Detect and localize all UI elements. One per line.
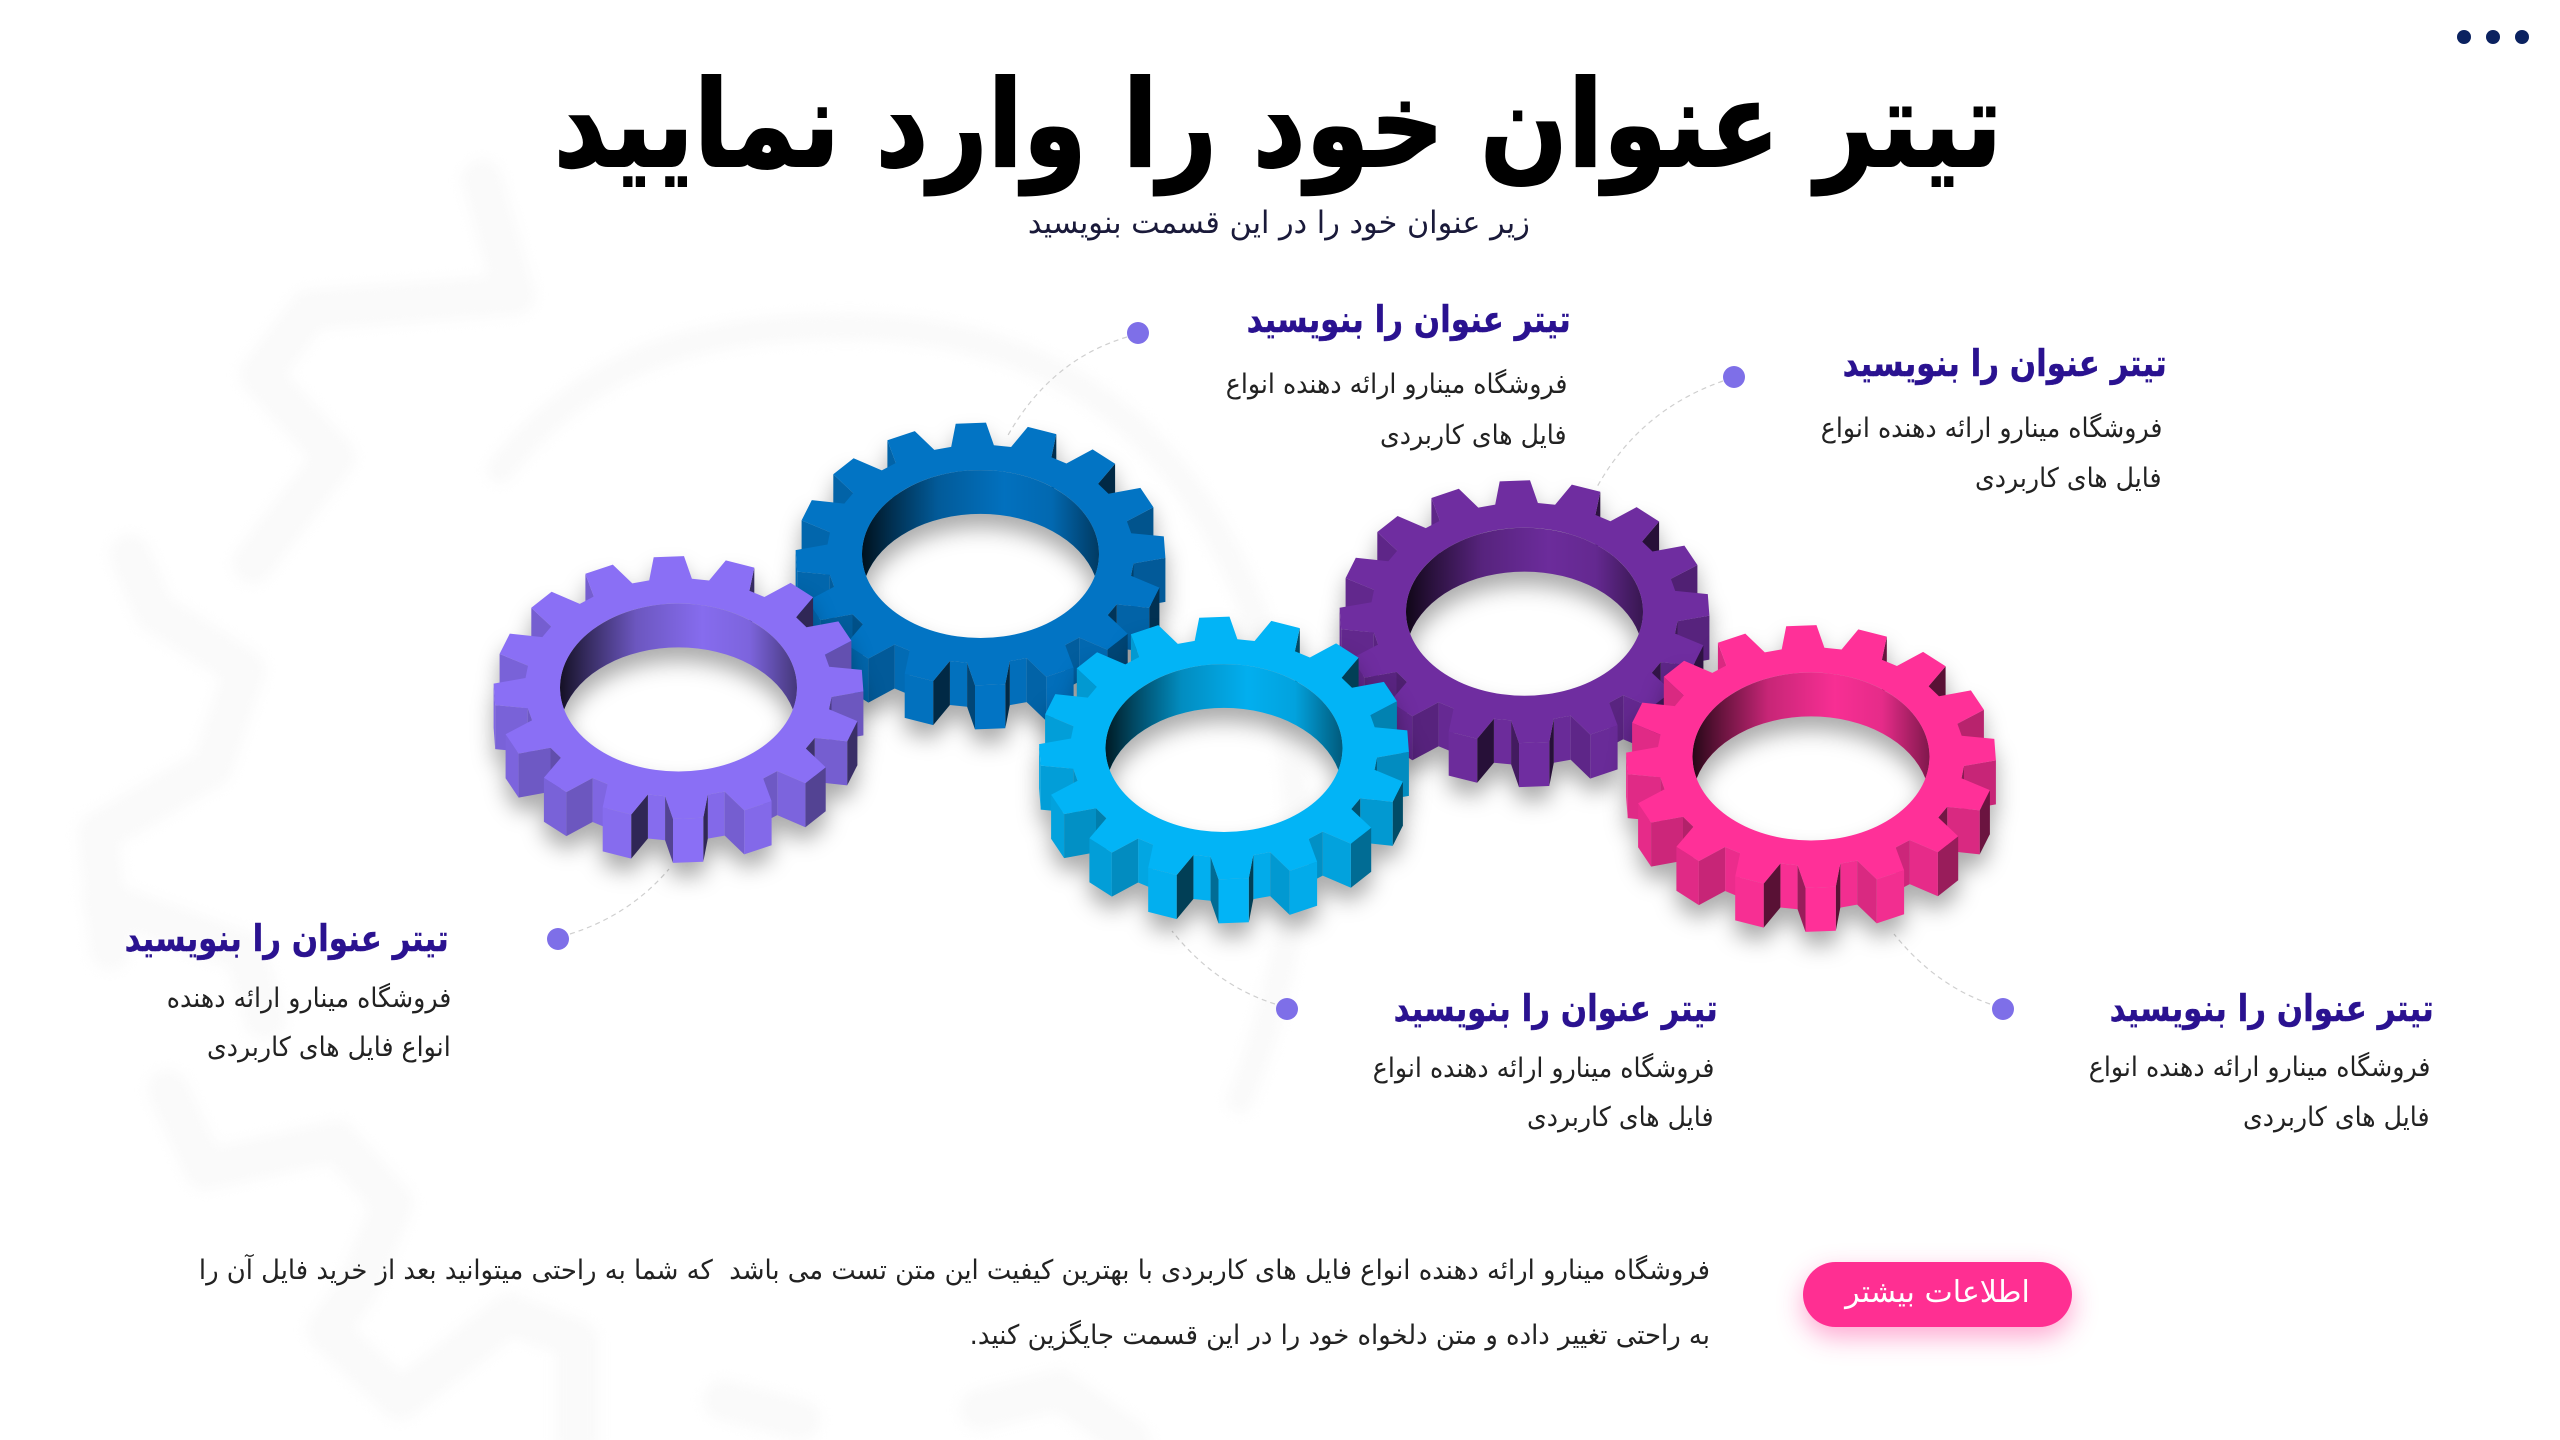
gear: violet [494, 556, 863, 863]
text: فایل های کاربردی [1527, 1102, 1714, 1133]
subtitle: زیر عنوان خود را در این قسمت بنویسید [1028, 205, 1530, 241]
connector: callout 4 [1172, 931, 1298, 1020]
button [1803, 1262, 2072, 1327]
title: تیتر عنوان خود را وارد نمایید [554, 56, 2002, 195]
text: فروشگاه مینارو ارائه دهنده انواع [1820, 413, 2162, 444]
connector: callout 2 [1597, 366, 1745, 487]
text: تیتر عنوان را بنویسید [125, 917, 449, 960]
text: فروشگاه مینارو ارائه دهنده انواع [1225, 369, 1567, 400]
text: فروشگاه مینارو ارائه دهنده [166, 983, 451, 1014]
connector: callout 3 [547, 869, 669, 950]
callout 2 [1820, 342, 2167, 494]
text: فایل های کاربردی [1380, 420, 1567, 451]
callout 1 [1225, 298, 1571, 451]
text: فایل های کاربردی [1975, 463, 2162, 494]
background watermark gear [98, 180, 1296, 1440]
gear: cyan [1039, 617, 1409, 923]
text: تیتر عنوان را بنویسید [1843, 342, 2167, 385]
paragraph: فروشگاه مینارو ارائه دهنده انواع فایل های کاربردی با بهترین کیفیت این متن تست می باشد که شما به راحتی میتوانید بعد از خرید فایل آن را به راحتی تغییر داده و متن دلخواه خود را در این قسمت جایگزین کنید. [199, 1255, 1710, 1351]
gear: dark purple [1340, 480, 1709, 787]
text: فروشگاه مینارو ارائه دهنده انواع [2088, 1052, 2430, 1083]
callout 3 [125, 917, 451, 1063]
text: تیتر عنوان را بنویسید [1247, 298, 1571, 341]
gear: pink [1626, 625, 1996, 932]
callout 4 [1372, 987, 1718, 1133]
gear: blue [796, 423, 1165, 729]
text: فروشگاه مینارو ارائه دهنده انواع [1372, 1053, 1714, 1084]
text: تیتر عنوان را بنویسید [1394, 987, 1718, 1030]
text: فایل های کاربردی [2243, 1102, 2430, 1133]
button: اطلاعات بیشتر [1845, 1275, 2030, 1310]
text: تیتر عنوان را بنویسید [2110, 987, 2434, 1030]
connector: callout 5 [1894, 934, 2014, 1020]
callout 5 [2088, 987, 2434, 1133]
connector: callout 1 [1007, 322, 1149, 437]
text: انواع فایل های کاربردی [207, 1032, 451, 1063]
menu dots [2457, 30, 2529, 44]
